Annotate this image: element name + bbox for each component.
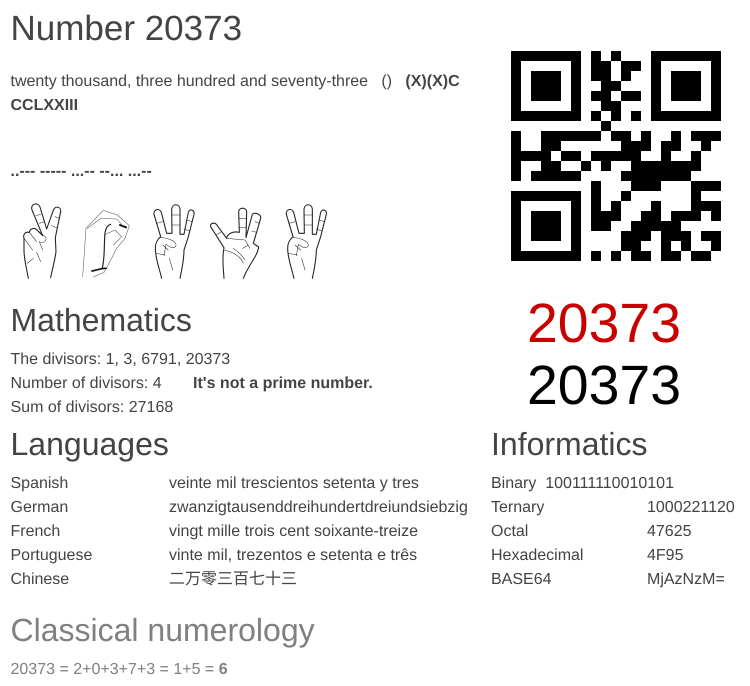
icon: hand sign 0: [83, 210, 129, 277]
title: Number 20373: [10, 9, 242, 48]
informatics table: 1000221120: [647, 499, 735, 516]
informatics table: Hexadecimal: [491, 547, 583, 564]
informatics table: Binary 100111110010101: [491, 475, 674, 492]
language translations: vinte mil, trezentos e setenta e três: [169, 547, 417, 564]
prime status: It's not a prime number.: [193, 375, 373, 392]
language names: Spanish: [10, 475, 68, 492]
language names: French: [10, 523, 60, 540]
black number: 20373: [527, 354, 681, 416]
language translations: 二万零三百七十三: [169, 571, 297, 588]
morse code: ..--- ----- ...-- --... ...--: [10, 163, 152, 180]
heading: mathematics: Mathematics: [10, 302, 192, 338]
number name and roman numeral: twenty thousand, three hundred and seventy-three () (X)(X)C CCLXXIII: [10, 73, 460, 114]
informatics table: Octal: [491, 523, 528, 540]
language names: German: [10, 499, 68, 516]
sum of divisors: Sum of divisors: 27168: [10, 399, 173, 416]
language translations: zwanzigtausenddreihundertdreiundsiebzig: [169, 499, 468, 516]
red number: 20373: [527, 292, 681, 354]
informatics table: BASE64: [491, 571, 551, 588]
heading: classical numerology: Classical numerology: [10, 612, 315, 648]
informatics table: MjAzNzM=: [647, 571, 725, 588]
sign language hands: [23, 203, 327, 279]
language names: Portuguese: [10, 547, 92, 564]
heading: informatics: Informatics: [491, 426, 647, 462]
informatics table: 4F95: [647, 547, 683, 564]
number of divisors: Number of divisors: 4: [10, 375, 162, 392]
language translations: vingt mille trois cent soixante-treize: [169, 523, 418, 540]
icon: hand sign 2: [24, 204, 61, 278]
informatics table: 47625: [647, 523, 692, 540]
icon: hand sign 3: [154, 205, 194, 278]
numerology sum: 20373 = 2+0+3+7+3 = 1+5 = 6: [10, 661, 228, 678]
language translations: [169, 475, 468, 588]
informatics table: Ternary: [491, 499, 544, 516]
icon: hand sign 3: [286, 205, 326, 278]
language names: Chinese: [10, 571, 69, 588]
icon: hand sign 7: [210, 208, 261, 278]
heading: languages: Languages: [10, 426, 169, 462]
divisors list: The divisors: 1, 3, 6791, 20373: [10, 351, 230, 368]
QR code: [511, 51, 721, 261]
informatics table: [491, 475, 735, 588]
language names: [10, 475, 92, 588]
language translations: veinte mil trescientos setenta y tres: [169, 475, 419, 492]
